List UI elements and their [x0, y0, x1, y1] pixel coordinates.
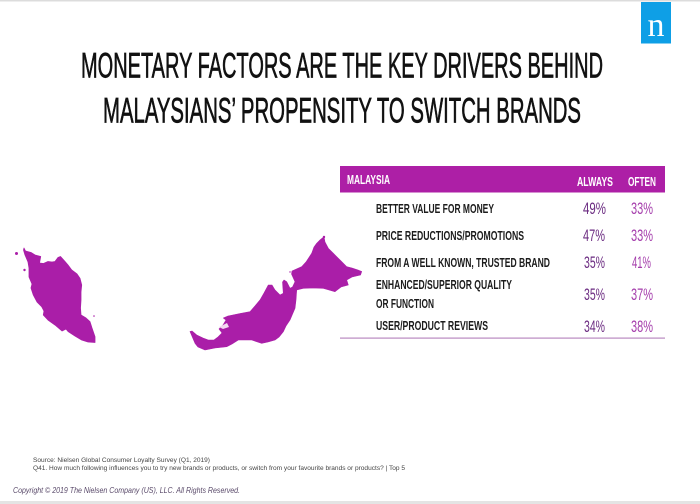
source note	[33, 457, 405, 472]
row: price reductions: 33%	[631, 226, 653, 245]
row: price reductions: 47%	[583, 226, 605, 245]
table header: OFTEN	[628, 175, 656, 189]
copyright: Copyright © 2019 The Nielsen Company (US), LLC. All Rights Reserved.	[13, 486, 240, 495]
row: price reductions: PRICE REDUCTIONS/PROMOTIONS	[376, 229, 524, 243]
table: switching factors	[340, 166, 665, 339]
logo: Nielsen n: n	[648, 7, 664, 44]
row: enhanced quality: 35%	[584, 285, 605, 304]
row: better value: BETTER VALUE FOR MONEY	[376, 202, 494, 216]
row: reviews: USER/PRODUCT REVIEWS	[376, 319, 488, 333]
row: enhanced quality: OR FUNCTION	[376, 297, 434, 311]
row: better value: 33%	[631, 199, 653, 218]
table header	[340, 166, 665, 192]
table header: MALAYSIA	[347, 173, 390, 187]
row: reviews: 34%	[584, 317, 605, 336]
row: price reductions	[376, 226, 653, 245]
row: trusted brand: 35%	[584, 253, 605, 272]
row: trusted brand: 41%	[632, 253, 651, 272]
logo: Nielsen n	[641, 2, 671, 44]
map: Peninsular Malaysia	[15, 248, 95, 342]
row: better value	[376, 199, 653, 218]
title	[81, 46, 603, 130]
row: enhanced quality: 37%	[631, 285, 653, 304]
row: trusted brand: FROM A WELL KNOWN, TRUSTED BRAND	[376, 256, 550, 270]
map: East Malaysia	[190, 236, 362, 350]
row: reviews	[376, 317, 653, 336]
row: better value: 49%	[583, 199, 606, 218]
row: enhanced quality	[376, 278, 653, 311]
table header: ALWAYS	[577, 175, 613, 189]
row: reviews: 38%	[631, 317, 653, 336]
source note: Q41. How much following influences you to try new brands or products, or switch from your favourite brands or products? | Top 5	[33, 465, 405, 472]
row: enhanced quality: ENHANCED/SUPERIOR QUALITY	[376, 278, 512, 292]
row: trusted brand	[376, 253, 651, 272]
source note: Source: Nielsen Global Consumer Loyalty Survey (Q1, 2019)	[33, 457, 210, 464]
